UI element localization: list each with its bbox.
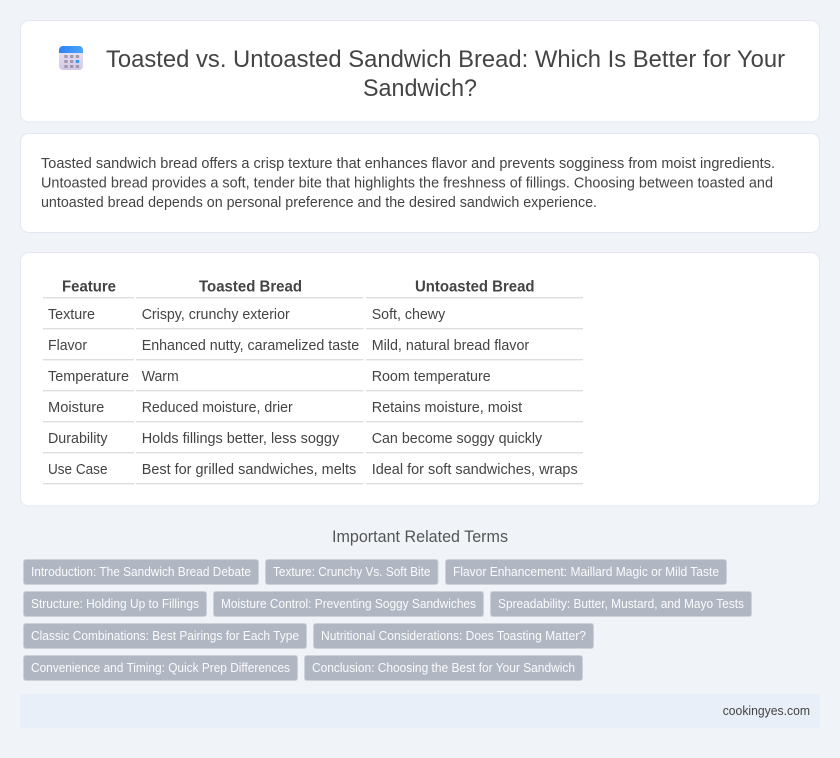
tag: Moisture Control: Preventing Soggy Sandwiches	[221, 596, 476, 611]
tag list	[24, 560, 752, 680]
row: temperature: Temperature	[48, 369, 129, 385]
tag	[304, 656, 582, 680]
tag	[490, 592, 752, 616]
icon: calendar	[59, 46, 83, 70]
row: flavor: Enhanced nutty, caramelized taste	[142, 338, 359, 354]
tag: Structure: Holding Up to Fillings	[31, 596, 199, 611]
row: moisture: Reduced moisture, drier	[142, 400, 293, 416]
title: Toasted vs. Untoasted Sandwich Bread: Which Is Better for Your	[106, 46, 785, 73]
row: use case	[48, 462, 578, 478]
row: texture: Crispy, crunchy exterior	[142, 307, 290, 323]
tag	[446, 560, 726, 584]
row: use case: Best for grilled sandwiches, melts	[142, 462, 356, 478]
row: texture: Texture	[48, 307, 95, 323]
table header	[62, 278, 534, 296]
tag: Flavor Enhancement: Maillard Magic or Mild Taste	[453, 564, 719, 579]
tag: Nutritional Considerations: Does Toasting Matter?	[321, 628, 586, 643]
footer	[20, 694, 820, 728]
row: moisture: Moisture	[48, 400, 104, 416]
row: flavor: Mild, natural bread flavor	[372, 338, 529, 354]
text block: introduction: Untoasted bread provides a soft, tender bite that highlights the freshness of fillings. Choosing between toasted and	[41, 176, 773, 192]
row: durability: Holds fillings better, less soggy	[142, 431, 340, 447]
row: durability: Durability	[48, 431, 108, 447]
title	[106, 46, 785, 102]
row: durability: Can become soggy quickly	[372, 431, 543, 447]
tag	[266, 560, 438, 584]
row: texture	[48, 307, 446, 323]
row: texture: Soft, chewy	[372, 307, 446, 323]
table header: Untoasted Bread	[415, 278, 534, 296]
panel: introduction	[20, 134, 820, 232]
table header: Toasted Bread	[199, 278, 302, 296]
title: Sandwich?	[363, 75, 477, 102]
row: temperature: Warm	[142, 369, 179, 385]
row: moisture	[48, 400, 522, 416]
row: use case: Use Case	[48, 462, 108, 478]
row: flavor	[48, 338, 529, 354]
row: temperature	[48, 369, 491, 385]
panel: header card	[20, 20, 820, 122]
tag	[314, 624, 594, 648]
tag	[24, 656, 298, 680]
table header: Feature	[62, 278, 116, 296]
tag: Texture: Crunchy Vs. Soft Bite	[273, 564, 430, 579]
text block: introduction	[41, 156, 775, 211]
text block: introduction: Toasted sandwich bread offers a crisp texture that enhances flavor and prevents sogginess from moist ingredients.	[41, 156, 775, 172]
row: moisture: Retains moisture, moist	[372, 400, 522, 416]
panel: comparison table	[20, 252, 820, 506]
tag	[24, 592, 206, 616]
tag: Convenience and Timing: Quick Prep Differences	[31, 660, 290, 675]
row: flavor: Flavor	[48, 338, 87, 354]
footer source: cookingyes.com	[723, 703, 810, 718]
tag: Introduction: The Sandwich Bread Debate	[31, 564, 251, 579]
tag	[214, 592, 484, 616]
row: durability	[48, 431, 543, 447]
heading: important related terms: Important Related Terms	[332, 528, 508, 546]
tag: Conclusion: Choosing the Best for Your Sandwich	[312, 660, 575, 675]
tag	[24, 624, 306, 648]
tag: Classic Combinations: Best Pairings for Each Type	[31, 628, 299, 643]
tag: Spreadability: Butter, Mustard, and Mayo Tests	[498, 596, 744, 611]
row: temperature: Room temperature	[372, 369, 491, 385]
row: use case: Ideal for soft sandwiches, wraps	[372, 462, 578, 478]
tag	[24, 560, 258, 584]
text block: introduction: untoasted bread depends on personal preference and the desired sandwich experience.	[41, 195, 597, 211]
